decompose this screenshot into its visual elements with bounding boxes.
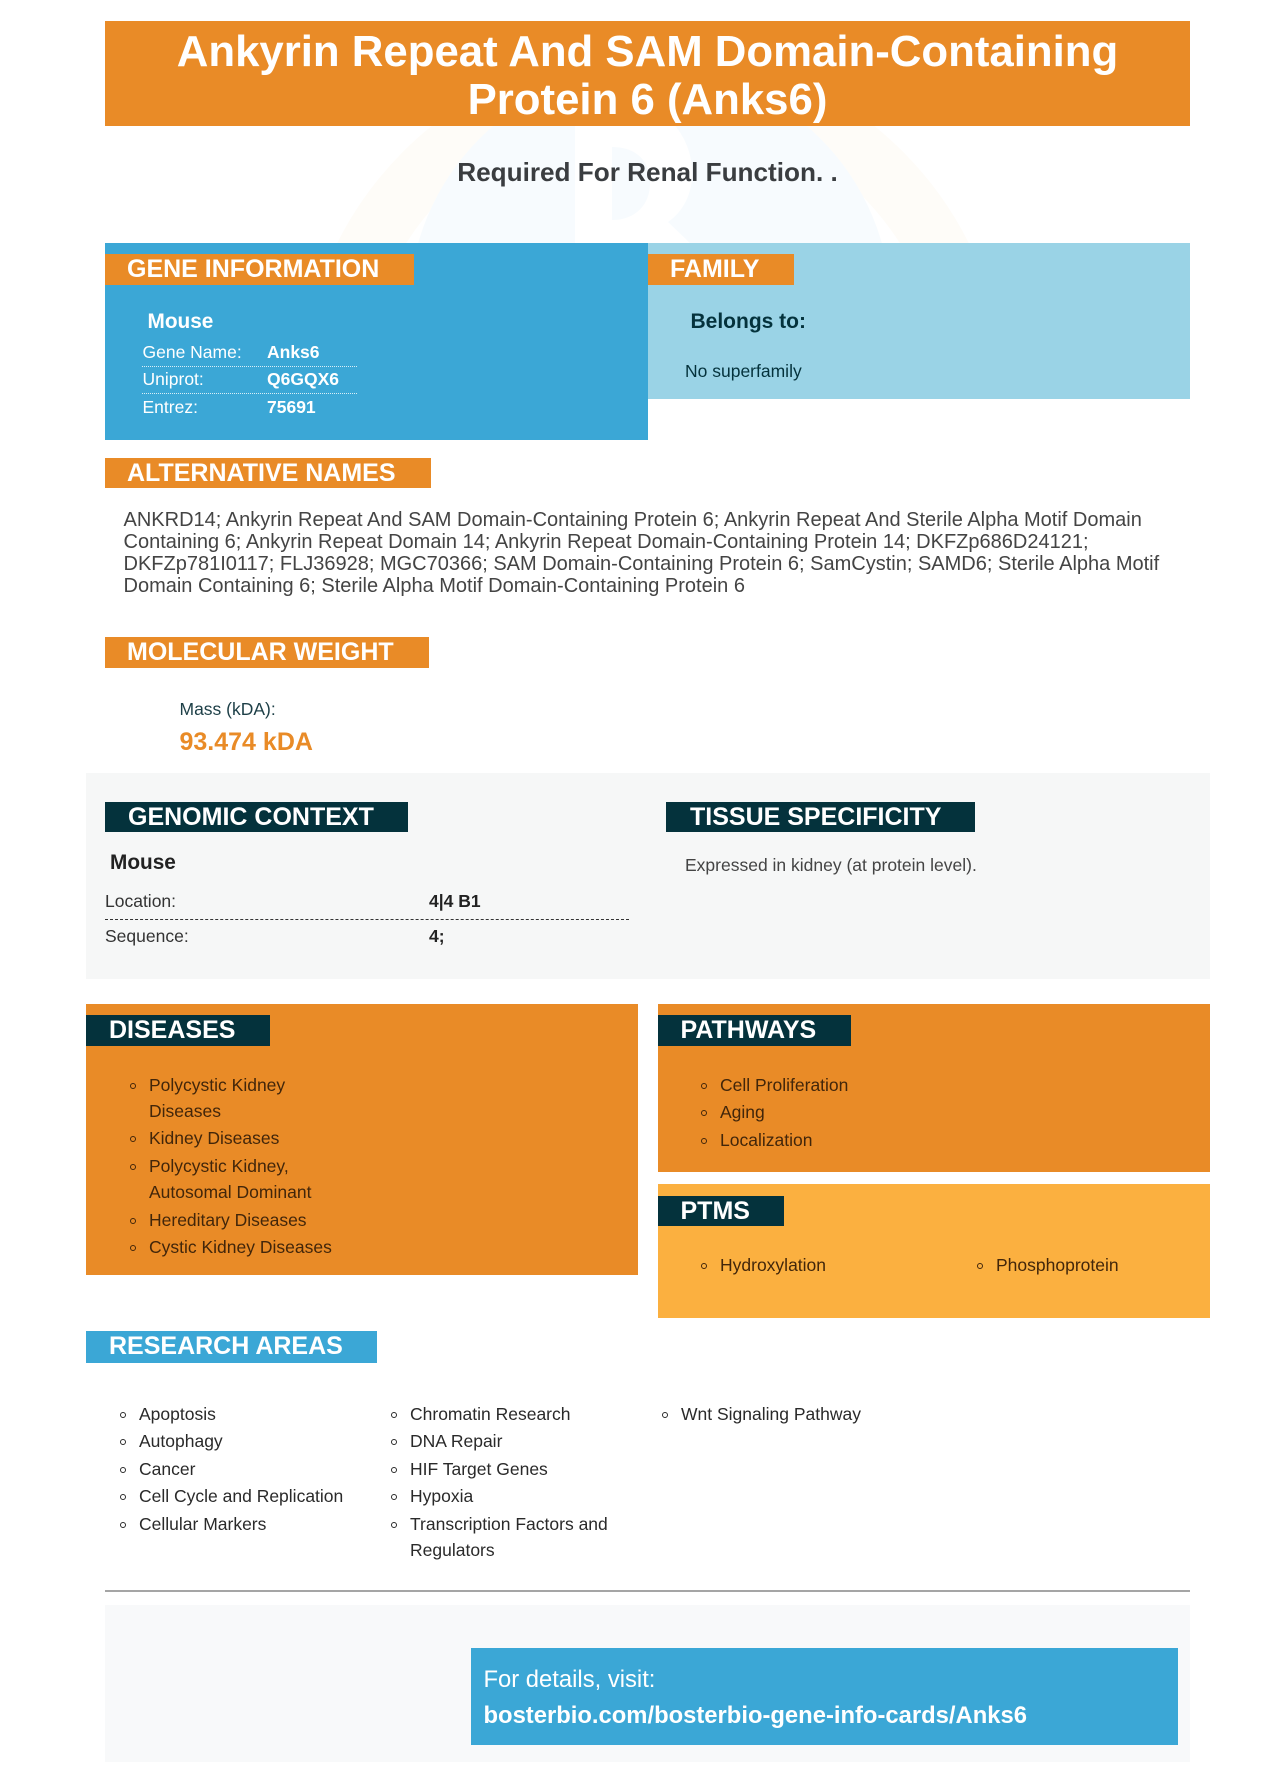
uniprot row: Q6GQX6 [267, 369, 339, 389]
uniprot row [142, 367, 357, 394]
research areas list: Transcription Factors and [410, 1514, 608, 1534]
research areas list: Cellular Markers [139, 1514, 266, 1534]
background logo watermark [0, 0, 1288, 243]
heading: diseases: DISEASES [109, 1016, 235, 1044]
research areas list: Autophagy [139, 1431, 223, 1451]
disease list: Polycystic Kidney [149, 1075, 285, 1095]
heading: diseases [86, 1015, 270, 1046]
entrez row: Entrez: [142, 396, 198, 416]
disease list [130, 1075, 332, 1257]
gene name row: Anks6 [267, 342, 320, 362]
pathway list: Cell Proliferation [720, 1075, 848, 1095]
ptm list: Phosphoprotein [996, 1255, 1119, 1275]
research areas list: Regulators [410, 1540, 495, 1560]
heading: ptms [658, 1196, 784, 1226]
alternative names text: ANKRD14; Ankyrin Repeat And SAM Domain-Containing Protein 6; Ankyrin Repeat And Sterile Alpha Motif Domain [124, 509, 1142, 531]
mass label: Mass (kDA): [180, 699, 276, 719]
research areas list: DNA Repair [410, 1431, 502, 1451]
heading: alternative names: ALTERNATIVE NAMES [127, 459, 396, 487]
heading: family: FAMILY [670, 255, 759, 283]
tissue specificity text: Expressed in kidney (at protein level). [685, 855, 977, 875]
location row [105, 888, 629, 920]
callout: details link [471, 1648, 1178, 1745]
alternative names text: Containing 6; Ankyrin Repeat Domain 14; Ankyrin Repeat Domain-Containing Protein 14; DKFZp686D24121; [124, 531, 1088, 553]
species label: Mouse [148, 310, 213, 332]
heading: molecular weight: MOLECULAR WEIGHT [127, 638, 394, 666]
disease list: Cystic Kidney Diseases [149, 1237, 332, 1257]
entrez row: 75691 [267, 396, 316, 416]
superfamily text: No superfamily [685, 361, 802, 381]
panel: family [648, 243, 1190, 399]
gene name row: Gene Name: [142, 342, 242, 362]
research areas list: Apoptosis [139, 1404, 216, 1424]
heading: family [648, 254, 794, 285]
disease list: Hereditary Diseases [149, 1210, 307, 1230]
title banner [105, 21, 1190, 126]
title banner: Ankyrin Repeat And SAM Domain-Containing [177, 27, 1118, 76]
disease list: Polycystic Kidney, [149, 1156, 289, 1176]
panel: pathways [658, 1004, 1210, 1172]
sequence row: Sequence: [105, 926, 189, 946]
research areas list [120, 1404, 861, 1560]
heading: gene information: GENE INFORMATION [127, 255, 379, 283]
heading: tissue specificity: TISSUE SPECIFICITY [690, 803, 941, 831]
research areas list: Wnt Signaling Pathway [681, 1404, 861, 1424]
research areas list: Cell Cycle and Replication [139, 1486, 343, 1506]
location row: Location: [105, 891, 176, 911]
heading: pathways [658, 1015, 851, 1046]
heading: genomic context: GENOMIC CONTEXT [128, 803, 374, 831]
disease list: Diseases [149, 1101, 221, 1121]
sequence row [105, 926, 445, 946]
disease list: Kidney Diseases [149, 1128, 279, 1148]
research areas list: Hypoxia [410, 1486, 473, 1506]
alternative names text [124, 509, 1160, 597]
callout: details link: bosterbio.com/bosterbio-gene-info-cards/Anks6 [484, 1702, 1027, 1728]
research areas list: Cancer [139, 1459, 195, 1479]
panel: diseases [86, 1004, 638, 1275]
pathway list: Localization [720, 1130, 812, 1150]
belongs to label: Belongs to: [690, 310, 806, 332]
pathway list [701, 1075, 848, 1150]
heading: ptms: PTMS [680, 1197, 750, 1225]
mass value: 93.474 kDA [180, 728, 313, 756]
research areas list: Chromatin Research [410, 1404, 570, 1424]
ptm list: Hydroxylation [720, 1255, 826, 1275]
alternative names text: DKFZp781I0117; FLJ36928; MGC70366; SAM Domain-Containing Protein 6; SamCystin; SAMD6; Sterile Alpha Motif [124, 553, 1159, 575]
alternative names text: Domain Containing 6; Sterile Alpha Motif Domain-Containing Protein 6 [124, 575, 745, 597]
heading: pathways: PATHWAYS [680, 1016, 816, 1044]
panel: footer [105, 1605, 1190, 1762]
disease list: Autosomal Dominant [149, 1182, 311, 1202]
heading: research areas: RESEARCH AREAS [109, 1332, 343, 1360]
uniprot row: Uniprot: [142, 369, 204, 389]
panel: gene information [105, 243, 648, 440]
panel: ptms [658, 1184, 1210, 1318]
location row: 4|4 B1 [429, 891, 481, 911]
title banner: Protein 6 (Anks6) [468, 75, 827, 124]
sequence row: 4; [429, 926, 445, 946]
panel: genomic context and tissue specificity [86, 773, 1210, 979]
gene name row [142, 339, 357, 367]
callout: details link: For details, visit: [484, 1666, 655, 1692]
species label: Mouse [110, 850, 176, 874]
entrez row [142, 396, 316, 416]
ptm list [701, 1255, 1119, 1275]
research areas list: HIF Target Genes [410, 1459, 548, 1479]
subtitle: Required For Renal Function. . [457, 157, 838, 187]
pathway list: Aging [720, 1102, 765, 1122]
